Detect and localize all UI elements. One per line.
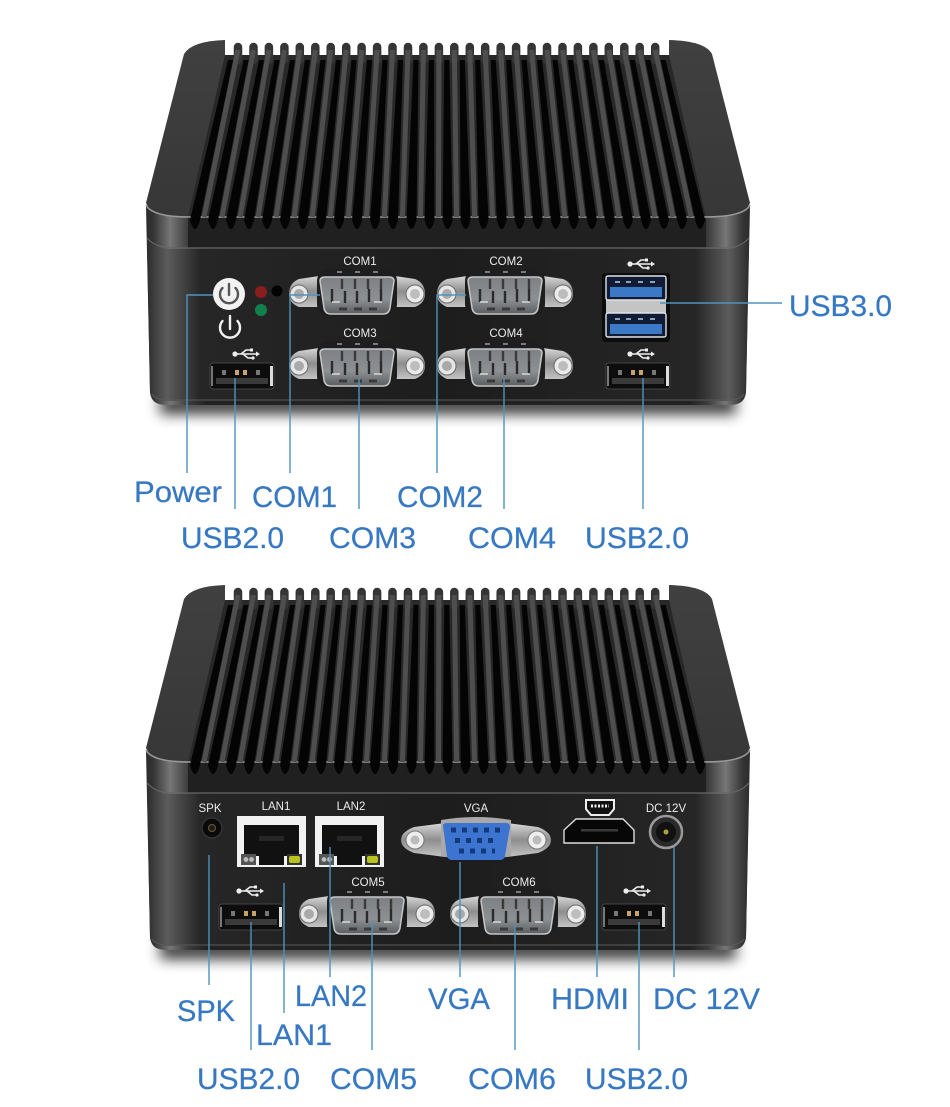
label: USB2.0 bottom right: USB2.0 — [585, 1063, 688, 1096]
port label: COM1: COM1 — [343, 256, 377, 268]
label: USB3.0: USB3.0 — [789, 290, 892, 323]
icon: USB symbol top right — [627, 258, 655, 270]
icon: USB symbol left — [232, 348, 260, 360]
label: HDMI: HDMI — [551, 983, 629, 1016]
USB 2.0 port right — [602, 904, 666, 930]
audio jack — [202, 818, 222, 838]
connector: COM5 — [299, 889, 435, 936]
label: SPK: SPK — [177, 995, 235, 1028]
label: LAN2: LAN2 — [295, 980, 367, 1013]
port label: COM2: COM2 — [489, 256, 523, 268]
callout lines: top device — [187, 295, 782, 509]
port label: LAN2: LAN2 — [337, 801, 365, 813]
connector: COM1 — [289, 269, 425, 316]
port label: DC 12V: DC 12V — [646, 803, 686, 815]
label: COM4: COM4 — [468, 522, 556, 555]
label: Power: Power — [134, 476, 222, 509]
label: COM5: COM5 — [330, 1063, 417, 1096]
USB 3.0 double port — [602, 273, 670, 342]
HDMI port — [564, 819, 634, 843]
connector: COM2 — [437, 269, 573, 316]
label: COM6: COM6 — [468, 1063, 556, 1096]
case — [146, 40, 750, 414]
device 2: rear ports view — [146, 585, 750, 959]
label: COM2: COM2 — [397, 481, 483, 514]
USB 2.0 port left — [210, 363, 274, 389]
USB 2.0 port right — [606, 363, 670, 389]
icon: USB symbol right — [623, 886, 651, 897]
label: COM1: COM1 — [252, 481, 337, 514]
VGA connector — [401, 817, 551, 860]
port label: VGA: VGA — [464, 803, 488, 815]
port label: COM6: COM6 — [502, 877, 536, 889]
connector: COM4 — [437, 341, 573, 388]
label: COM3: COM3 — [329, 522, 416, 555]
label: DC 12V: DC 12V — [653, 983, 760, 1016]
power button — [213, 278, 245, 310]
label: USB2.0 left: USB2.0 — [181, 522, 284, 555]
label: USB2.0 bottom left: USB2.0 — [197, 1063, 300, 1096]
callout lines: bottom device — [209, 846, 674, 1050]
status LEDs — [255, 286, 282, 316]
port label: COM3: COM3 — [343, 328, 377, 340]
port label: COM5: COM5 — [351, 877, 385, 889]
port label: SPK: SPK — [198, 803, 222, 815]
icon: USB symbol right — [627, 348, 655, 360]
connector: COM6 — [450, 889, 586, 936]
label: VGA: VGA — [428, 983, 490, 1016]
icon: power symbol — [220, 316, 240, 338]
USB 2.0 port left — [219, 904, 283, 930]
case — [146, 585, 750, 959]
label: USB2.0 right: USB2.0 — [585, 522, 689, 555]
icon: HDMI symbol — [586, 800, 614, 815]
device 1: front ports view — [146, 40, 750, 414]
port label: COM4: COM4 — [489, 328, 523, 340]
LAN2 port — [315, 816, 384, 867]
connector: COM3 — [289, 341, 425, 388]
label: LAN1: LAN1 — [256, 1019, 332, 1052]
DC power jack — [650, 816, 682, 848]
LAN1 port — [237, 816, 306, 867]
port label: LAN1: LAN1 — [262, 801, 290, 813]
icon: USB symbol left — [236, 886, 264, 897]
